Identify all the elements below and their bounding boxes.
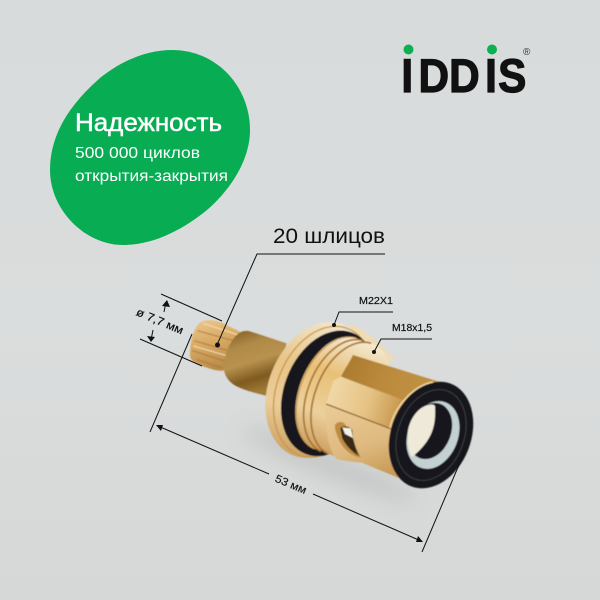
callout: M18x1,5: M18x1,5 [392, 323, 432, 334]
stem [223, 331, 287, 397]
o-ring [264, 317, 394, 470]
callout: M18x1,5 [372, 323, 432, 354]
callout: M22X1 [332, 296, 393, 327]
inner ceramic [408, 404, 435, 457]
dimension: length 53 mm: 53 мм [273, 473, 308, 497]
face seal assembly [374, 369, 488, 501]
inner dark ring [400, 396, 460, 466]
body edge line [326, 404, 392, 429]
logo registered mark: ® [523, 47, 531, 58]
body rim highlight [390, 382, 433, 428]
body: upper brown facet [341, 355, 440, 417]
dimension: length 53 mm [150, 334, 464, 552]
callout: M22X1: M22X1 [359, 296, 393, 307]
badge text line 1: 500 000 циклов [75, 145, 200, 162]
product shadow [237, 418, 423, 512]
flange [247, 307, 395, 473]
callout: 20 splines [215, 225, 385, 348]
product: brass cartridge [190, 307, 488, 501]
logo green dot left [404, 44, 414, 54]
logo green dot right [487, 44, 497, 54]
thread [280, 325, 407, 468]
body: lower facet [326, 404, 412, 483]
white cartridge core [397, 393, 469, 477]
logo wordmark: IDDIS [401, 51, 526, 103]
dimension: diameter 7.7 mm: ø 7,7 мм [134, 307, 185, 337]
callout: 20 splines: 20 шлицов [273, 225, 385, 248]
seal rings [383, 379, 479, 491]
face seal [374, 369, 488, 501]
badge heading: Надежность [75, 109, 222, 137]
body: bright facet [326, 377, 405, 430]
dimension: diameter 7.7 mm [134, 294, 222, 366]
badge text line 2: открытия-закрытия [75, 168, 228, 185]
spline head [190, 320, 242, 371]
slot [335, 422, 361, 457]
logo: IDDIS [401, 44, 531, 103]
center assembly [247, 307, 440, 483]
spline head and stem [190, 320, 287, 397]
green badge [50, 50, 250, 245]
